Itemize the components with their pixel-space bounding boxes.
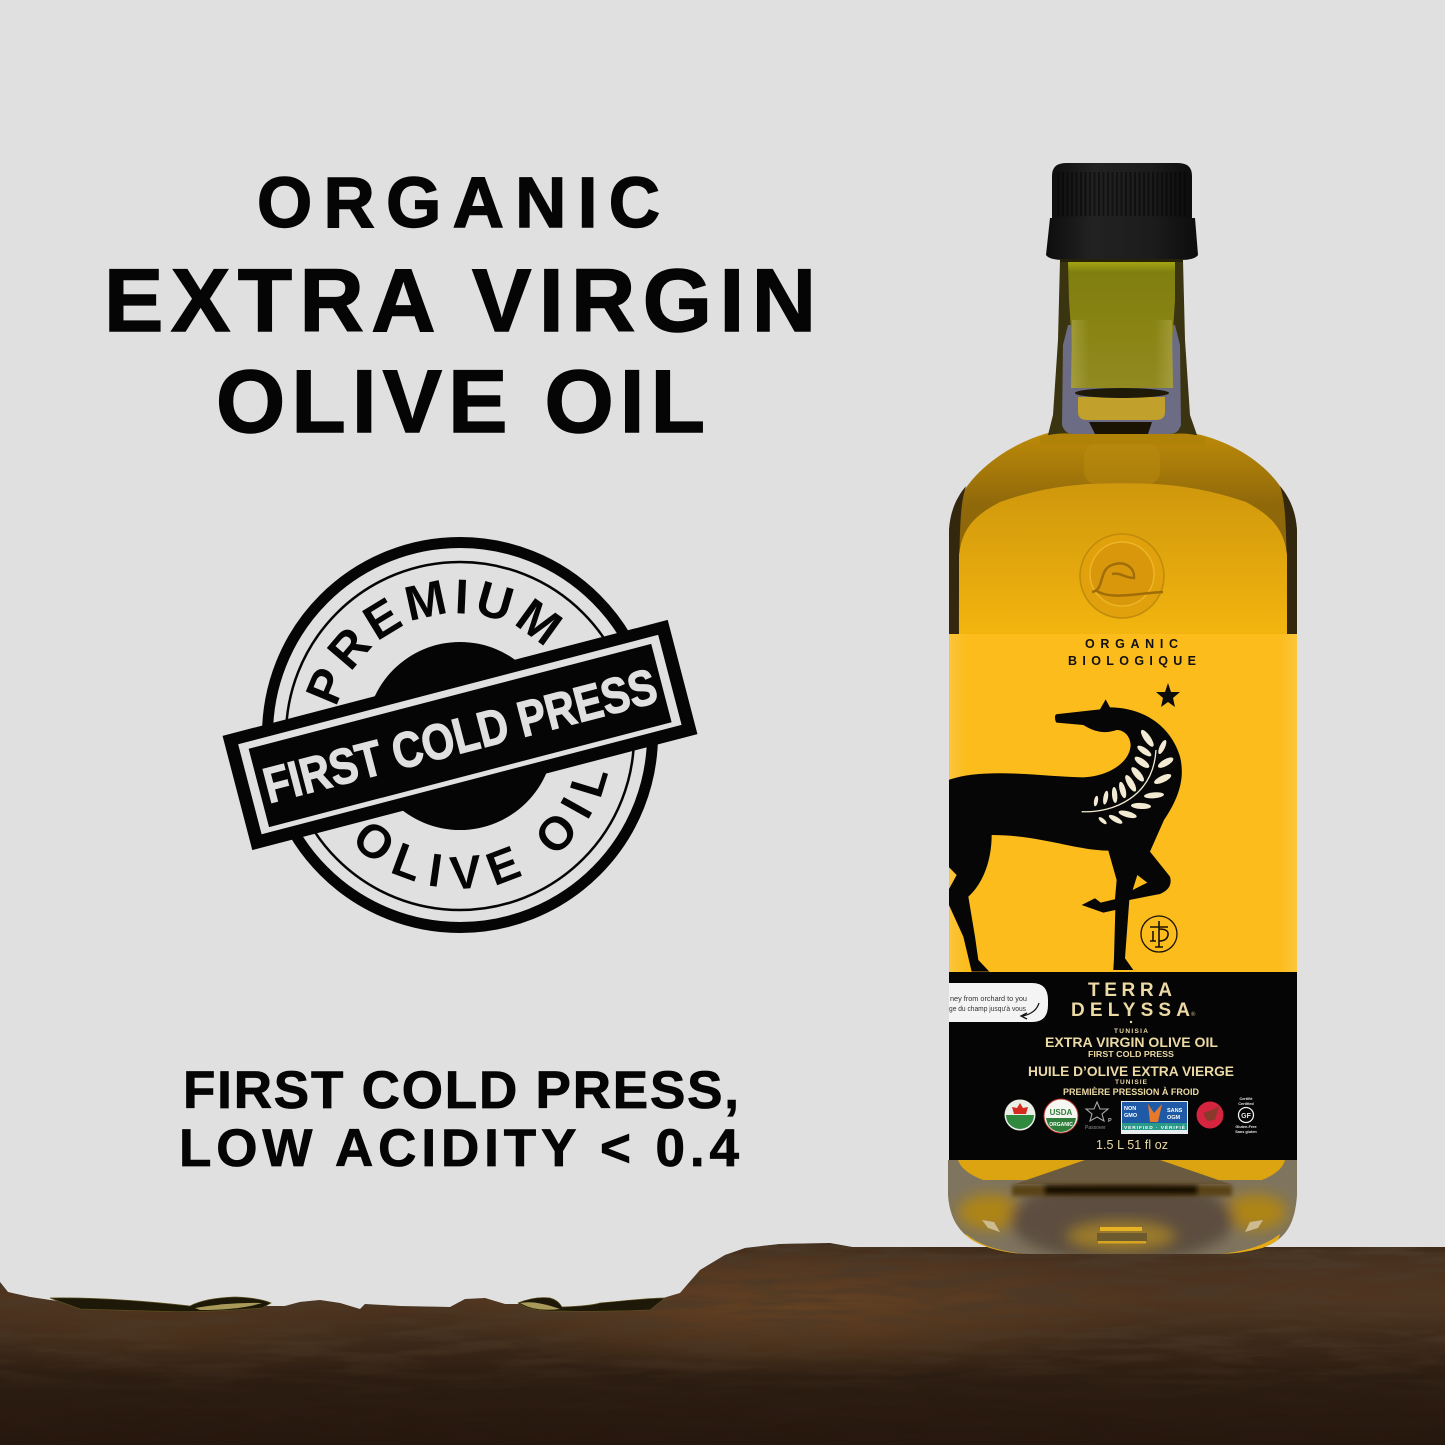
subheading: first cold press, low acidity: FIRST COLD PRESS, <box>183 1061 739 1120</box>
label heading: organic biologique: ORGANIC <box>1085 637 1178 651</box>
stamp banner <box>223 620 697 850</box>
badge: non-gmo project: OGM <box>1167 1115 1181 1121</box>
badge: non-gmo project: NON <box>1124 1106 1136 1112</box>
white journey tag: ney from orchard to you <box>950 994 1027 1003</box>
glass side walls <box>949 486 1297 640</box>
badge: usda organic: USDA <box>1050 1108 1073 1117</box>
horse illustration <box>947 699 1182 972</box>
badge: non-gmo project: VERIFIED · VÉRIFIÉ <box>1124 1123 1186 1131</box>
laurel branch <box>1082 728 1175 825</box>
brand name: terra delyssa: ® <box>1191 1011 1196 1018</box>
badge: canada organic <box>1004 1100 1036 1130</box>
certification badges <box>1004 1097 1257 1134</box>
bottle shoulders <box>949 433 1297 640</box>
label black panel <box>949 972 1297 1160</box>
icon: star <box>1156 683 1180 707</box>
badge: usda organic: ORGANIC <box>1049 1122 1073 1128</box>
badge: passover: P <box>1108 1118 1112 1124</box>
subheading: first cold press, low acidity: LOW ACIDITY < 0.4 <box>179 1119 740 1178</box>
product description text: HUILE D’OLIVE EXTRA VIERGE <box>1028 1063 1234 1079</box>
label yellow panel <box>949 634 1297 972</box>
badge: passover: Passover <box>1085 1125 1106 1131</box>
badge: gluten free: Certified <box>1238 1102 1254 1106</box>
olive strip right <box>518 1298 665 1311</box>
badge: red seal <box>1196 1102 1224 1128</box>
label heading: organic biologique: BIOLOGIQUE <box>1068 654 1196 668</box>
neck dark meniscus <box>1075 388 1169 398</box>
bottle cap <box>1046 163 1198 262</box>
neck grey-blue glass wall <box>1062 325 1181 434</box>
title: ORGANIC <box>257 164 660 243</box>
brand name: terra delyssa <box>1071 980 1196 1023</box>
label heading: organic biologique <box>1068 637 1196 668</box>
title: EXTRA VIRGIN <box>104 250 816 350</box>
olive oil bottle <box>945 163 1300 1262</box>
product description text: TUNISIE <box>1115 1079 1148 1086</box>
brand name: terra delyssa: DELYSSA <box>1071 1000 1190 1021</box>
neck lower chamber <box>1078 397 1165 420</box>
white journey tag <box>949 983 1048 1022</box>
badge: passover <box>1085 1102 1112 1131</box>
stamp arc text: olive oil: OLIVE OIL <box>357 772 608 889</box>
product description text <box>1028 1028 1234 1097</box>
white journey tag: ge du champ jusqu'à vous <box>949 1004 1026 1013</box>
bottle base <box>948 1160 1297 1254</box>
subheading: first cold press, low acidity <box>179 1061 740 1178</box>
oil body <box>959 483 1287 640</box>
title <box>104 164 816 451</box>
badge: gluten free: Certifié <box>1239 1097 1253 1101</box>
badge: gluten free: Gluten-Free <box>1235 1125 1257 1129</box>
badge: non-gmo project: SANS <box>1167 1108 1183 1114</box>
badge: gluten free: GF <box>1241 1113 1252 1120</box>
neck dark glass <box>1048 260 1197 435</box>
badge: non-gmo project: GMO <box>1124 1113 1138 1119</box>
badge: gluten free: Sans gluten <box>1235 1130 1257 1134</box>
stamp banner: FIRST COLD PRESS <box>258 658 663 814</box>
icon: monogram <box>1141 916 1177 952</box>
horse silhouette <box>947 699 1182 972</box>
badge: non-gmo project <box>1121 1101 1188 1134</box>
badge: usda organic <box>1044 1099 1078 1133</box>
neck collar base <box>1040 433 1205 445</box>
stamp: premium olive oil first cold press <box>222 537 698 933</box>
olive strip left <box>50 1297 271 1312</box>
neck base shadow <box>1089 422 1152 434</box>
product description text: TUNISIA <box>1114 1028 1148 1035</box>
brand name: terra delyssa: TERRA <box>1088 980 1172 1001</box>
product description text: PREMIÈRE PRESSION À FROID <box>1063 1087 1199 1097</box>
embossed medallion <box>1080 534 1164 618</box>
title: OLIVE OIL <box>216 351 705 451</box>
product description text: EXTRA VIRGIN OLIVE OIL <box>1045 1035 1218 1050</box>
volume text: 1.5 L 51 fl oz <box>1096 1138 1168 1152</box>
product description text: FIRST COLD PRESS <box>1088 1049 1174 1059</box>
neck side highlight <box>1071 320 1173 388</box>
label edge sheen <box>949 634 1297 1160</box>
neck oil <box>1068 262 1175 388</box>
wooden surface <box>0 1240 1445 1445</box>
shoulder ghost <box>1084 444 1160 484</box>
stamp arc text: premium: PREMIUM <box>306 580 563 704</box>
badge: gluten free <box>1235 1097 1257 1134</box>
